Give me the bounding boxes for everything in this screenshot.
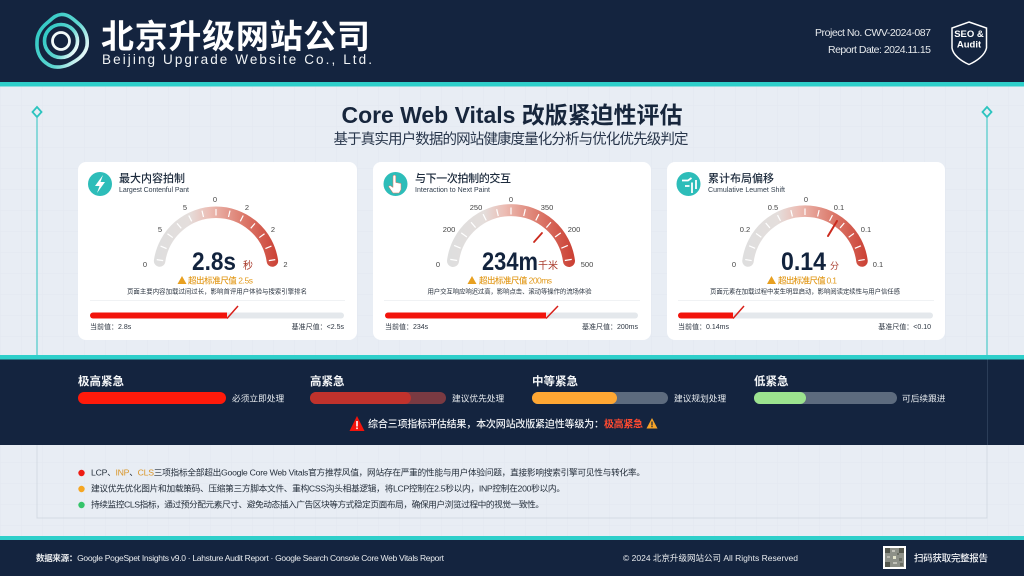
icon: layout shift arrows xyxy=(676,172,700,196)
LCP value: 2.8s xyxy=(192,248,236,276)
gauge: LCP: 0 xyxy=(143,260,147,269)
report date: Report Date: 2024.11.15 xyxy=(828,44,931,56)
gauge: CLS: 0 xyxy=(732,260,736,269)
INP labels: 基准尺值：200ms xyxy=(582,322,638,331)
INP progress bar xyxy=(385,306,638,318)
level: low urgency: 低紧急 xyxy=(754,374,789,388)
overall urgency conclusion: 综合三项指标评估结果，本次网站改版紧迫性等级为： xyxy=(368,418,604,430)
finding 2: 建议优先优化图片和加载策码、压缩第三方脚本文件、重构CSS沟头相基逻辑，将LCP控制在2.5秒以内，INP控制在200秒以内。 xyxy=(91,482,565,494)
frame: left connector with diamond xyxy=(32,107,42,355)
QR call to action: 扫码获取完整报告 xyxy=(914,552,988,564)
gauge: LCP: 2 xyxy=(283,260,288,269)
gauge: LCP: 2 xyxy=(245,203,249,212)
overall urgency conclusion: 极高紧急 xyxy=(604,418,643,430)
gauge: INP: 200 xyxy=(443,225,455,234)
project number: Project No. CWV-2024-087 xyxy=(815,27,931,39)
panel: CLS xyxy=(667,162,945,340)
gauge: LCP: 2 xyxy=(271,225,275,234)
LCP labels: 基准尺值：<2.5s xyxy=(292,322,344,331)
CLS heading: Cumulative Leumet Shift xyxy=(708,187,785,194)
footer band xyxy=(0,536,1024,576)
CLS description: 页面元素在加载过程中发生明显启动，影响阅读定续性与用户信任感 xyxy=(710,286,901,296)
gauge: INP: 0 xyxy=(509,195,513,204)
level: extreme urgency: 极高紧急 xyxy=(78,374,124,388)
INP warning: 超出标准尺值 200ms xyxy=(479,276,552,286)
header band xyxy=(0,0,1024,86)
icon: pointing hand xyxy=(384,172,408,196)
gauge: LCP xyxy=(143,195,288,269)
icon: company logo xyxy=(37,14,87,67)
gauge: LCP: 0 xyxy=(213,195,217,204)
LCP heading: Largest Contenful Pant xyxy=(119,187,189,194)
gauge needle xyxy=(534,233,542,242)
company name: 北京升级网站公司 xyxy=(101,18,370,55)
gauge: INP xyxy=(436,195,593,269)
CLS heading xyxy=(708,171,785,194)
CLS value: 分 xyxy=(830,261,839,271)
CLS warning: 超出标准尺值 0.1 xyxy=(778,276,837,286)
icon: red warning xyxy=(350,416,364,431)
level: low urgency xyxy=(754,374,946,404)
level: low urgency: 可后续跟进 xyxy=(902,392,946,404)
gauge: CLS: 0 xyxy=(804,195,808,204)
gauge needle xyxy=(828,221,837,236)
frame: right connector with diamond xyxy=(982,107,992,355)
CLS progress bar xyxy=(678,306,933,318)
overall urgency conclusion xyxy=(350,416,658,431)
findings list xyxy=(78,466,645,510)
INP value: 234m xyxy=(482,248,538,276)
gauge: CLS: 0.1 xyxy=(873,260,883,269)
icon: lightning xyxy=(88,172,112,196)
gauge: CLS: 0.1 xyxy=(834,203,844,212)
level: high urgency: 高紧急 xyxy=(310,374,345,388)
icon: SEO audit shield: Audit xyxy=(957,40,982,50)
gauge: INP: 200 xyxy=(568,225,580,234)
gauge: CLS: 0.2 xyxy=(740,225,750,234)
title: Core Web Vitals 改版紧迫性评估 xyxy=(342,102,682,128)
gauge: INP: 250 xyxy=(470,203,482,212)
level: extreme urgency: 必须立即处理 xyxy=(232,392,284,404)
panel: INP xyxy=(373,162,651,340)
gauge: CLS xyxy=(732,195,883,269)
INP value: 千米 xyxy=(538,259,558,272)
INP description: 用户交互响应响迟过高，影响点击、滚动等操作的流场体验 xyxy=(428,286,592,296)
LCP labels: 当前值：2.8s xyxy=(90,322,132,331)
CLS labels: 基准尺值：<0.10 xyxy=(878,322,931,331)
company english name: Beijing Upgrade Website Co., Ltd. xyxy=(102,52,372,67)
icon: SEO audit shield xyxy=(952,22,986,64)
gauge: INP: 350 xyxy=(541,203,553,212)
gauge: CLS: 0.5 xyxy=(768,203,778,212)
INP heading xyxy=(415,171,511,194)
urgency band xyxy=(0,355,1024,445)
INP heading: Interaction to Next Paint xyxy=(415,187,490,194)
gauge: CLS: 0.1 xyxy=(861,225,871,234)
gauge: LCP: 5 xyxy=(183,203,187,212)
level: high urgency xyxy=(310,374,504,404)
finding 1: LCP、INP、CLS三项指标全部超出Google Core Web Vitals官方推荐风值，网站存在严重的性能与用户体验问题，直接影响搜索引擎可见性与转化率。 xyxy=(91,466,645,478)
CLS heading: 累计布局偏移 xyxy=(708,171,774,185)
INP labels xyxy=(385,322,638,331)
icon: SEO audit shield: SEO & xyxy=(954,29,984,40)
CLS labels xyxy=(678,322,931,331)
level: medium urgency: 中等紧急 xyxy=(532,374,578,388)
level: high urgency: 建议优先处理 xyxy=(452,392,504,404)
findings frame xyxy=(37,445,987,518)
level: medium urgency xyxy=(532,374,726,404)
gauge: LCP: 5 xyxy=(158,225,162,234)
LCP warning: 超出标准尺值 2.5s xyxy=(188,276,253,286)
LCP heading xyxy=(119,171,189,194)
INP labels: 当前值：234s xyxy=(385,322,429,331)
level: medium urgency: 建议规划处理 xyxy=(674,392,726,404)
icon: amber warning xyxy=(646,418,658,428)
LCP heading: 最大内容拍制 xyxy=(119,171,185,185)
INP heading: 与下一次拍制的交互 xyxy=(415,171,511,185)
data sources: 数据来源：Google PogeSpet Insights v9.0 · Lahsture Audit Report · Google Search Console Core Web Vitals Report xyxy=(36,553,445,563)
QR code xyxy=(883,546,906,569)
LCP labels xyxy=(90,322,344,331)
CLS value: 0.14 xyxy=(781,248,826,276)
CLS labels: 当前值：0.14ms xyxy=(678,322,729,331)
LCP description: 页面主要内容加载过间过长，影响首评用户体验与搜索引擎排名 xyxy=(127,286,307,296)
LCP progress bar xyxy=(90,306,344,318)
finding 3: 持续监控CLS指标，通过预分配元素尺寸、避免动态插入广告区块等方式稳定页面布局，确保用户浏览过程中的视觉一致性。 xyxy=(91,498,544,510)
gauge: INP: 500 xyxy=(581,260,593,269)
level: extreme urgency xyxy=(78,374,284,404)
panel: LCP xyxy=(78,162,357,340)
subtitle: 基于真实用户数据的网站健康度量化分析与优化优先级判定 xyxy=(334,130,688,148)
LCP value: 秒 xyxy=(243,259,253,272)
gauge: INP: 0 xyxy=(436,260,440,269)
copyright: © 2024 北京升级网站公司 All Rights Reserved xyxy=(623,553,798,563)
